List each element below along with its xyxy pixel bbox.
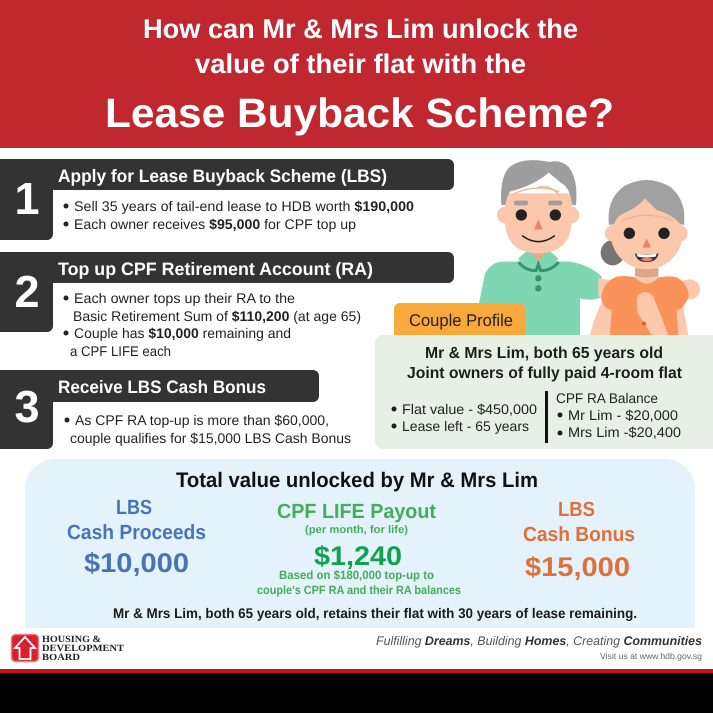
step 1 panel: Apply for Lease Buyback Scheme (LBS) [58, 166, 387, 186]
HDB wordmark [42, 635, 125, 663]
step 3 panel: Receive LBS Cash Bonus [58, 377, 266, 397]
step 1 panel: 1 [14, 173, 40, 224]
title: How can Mr & Mrs Lim unlock the [143, 14, 578, 44]
title [105, 14, 614, 136]
CPF LIFE payout: Based on $180,000 top-up to [279, 568, 434, 582]
step 1 panel: Sell 35 years of tail-end lease to HDB worth $190,000 [74, 198, 414, 214]
LBS cash proceeds: LBS [116, 496, 152, 519]
step 2 panel: Each owner tops up their RA to the [74, 290, 295, 306]
step 3 panel: As CPF RA top-up is more than $60,000, [75, 412, 329, 428]
heading: Total value unlocked by Mr & Mrs Lim [176, 469, 538, 492]
closing note: Mr & Mrs Lim, both 65 years old, retains their flat with 30 years of lease remaining. [113, 605, 637, 621]
tagline: Fulfilling Dreams, Building Homes, Creating Communities [376, 634, 702, 648]
man's hand behind wife [680, 279, 700, 299]
step 2 panel: Couple has $10,000 remaining and [74, 325, 291, 341]
footer [0, 629, 713, 669]
step 2 panel: 2 [14, 266, 40, 317]
panel: couple profile: Flat value - $450,000 [402, 401, 537, 417]
footer red stripe [0, 669, 713, 673]
website: Visit us at www.hdb.gov.sg [600, 651, 702, 661]
bottom black band [0, 673, 713, 713]
step 1 panel: Each owner receives $95,000 for CPF top up [74, 216, 356, 232]
panel: couple profile [375, 335, 713, 449]
LBS cash bonus: LBS [558, 498, 595, 521]
panel: couple profile: Mrs Lim -$20,400 [568, 424, 681, 440]
couple profile tab: Couple Profile [409, 311, 513, 330]
LBS cash proceeds [67, 496, 206, 578]
CPF LIFE payout: couple's CPF RA and their RA balances [257, 583, 461, 597]
CPF LIFE payout: (per month, for life) [305, 524, 408, 536]
icon: HDB logo [12, 634, 38, 662]
step 3 panel: couple qualifies for $15,000 LBS Cash Bonus [70, 430, 351, 446]
illustration: Mr and Mrs Lim [478, 160, 700, 335]
title: Lease Buyback Scheme? [105, 90, 614, 136]
CPF LIFE payout [257, 500, 461, 597]
step 3 panel [0, 370, 351, 449]
LBS cash bonus: Cash Bonus [523, 523, 635, 546]
CPF LIFE payout: $1,240 [314, 541, 402, 571]
panel: couple profile: CPF RA Balance [556, 390, 658, 406]
step 1 panel [0, 159, 454, 240]
title: value of their flat with the [195, 49, 526, 79]
icon: Mr Lim [478, 160, 610, 335]
step 2 panel: Top up CPF Retirement Account (RA) [58, 259, 373, 279]
step 2 panel [0, 252, 454, 359]
panel: couple profile: Lease left - 65 years [402, 418, 529, 434]
step 3 panel: 3 [14, 381, 40, 432]
LBS cash bonus [523, 498, 635, 582]
step 2 panel: a CPF LIFE each [70, 343, 171, 359]
HDB wordmark: DEVELOPMENT [42, 644, 125, 654]
panel: couple profile: Joint owners of fully paid 4-room flat [407, 365, 683, 382]
CPF LIFE payout: CPF LIFE Payout [277, 500, 436, 523]
icon: Mrs Lim [590, 180, 689, 335]
LBS cash proceeds: $10,000 [84, 548, 189, 578]
LBS cash bonus: $15,000 [525, 552, 630, 582]
panel: couple profile: Mr & Mrs Lim, both 65 years old [425, 345, 663, 362]
step 2 panel: Basic Retirement Sum of $110,200 (at age 65) [73, 308, 361, 324]
HDB wordmark: BOARD [42, 653, 80, 663]
HDB wordmark: HOUSING & [42, 635, 101, 645]
panel: couple profile: Mr Lim - $20,000 [568, 407, 678, 423]
panel: total value unlocked [25, 459, 695, 628]
couple profile tab [394, 303, 525, 335]
header banner [0, 0, 713, 148]
LBS cash proceeds: Cash Proceeds [67, 521, 206, 544]
